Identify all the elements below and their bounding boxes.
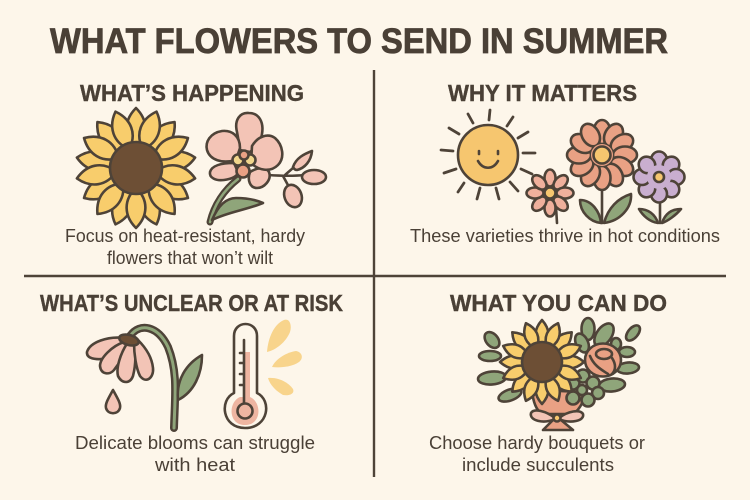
- sunflower: [500, 320, 584, 404]
- icon: orchid: [207, 113, 326, 222]
- succulent: [566, 370, 604, 406]
- icon: wilting flower: [87, 328, 202, 428]
- heading: what's happening: WHAT’S HAPPENING: [80, 80, 304, 106]
- icon: thermometer: [225, 324, 266, 428]
- panel: why it matters: [410, 80, 720, 246]
- body text: These varieties thrive in hot conditions: [410, 226, 720, 246]
- heading: what you can do: WHAT YOU CAN DO: [450, 290, 667, 316]
- body text: [75, 433, 315, 475]
- body text: [65, 226, 305, 268]
- heading: why it matters: WHY IT MATTERS: [448, 80, 637, 106]
- body text: Delicate blooms can struggle: [75, 433, 315, 453]
- body text: include succulents: [462, 455, 614, 475]
- heading: what's unclear or at risk: WHAT’S UNCLEAR OR AT RISK: [40, 290, 343, 316]
- panel: what's happening: [65, 80, 326, 268]
- panel: what you can do: [429, 290, 667, 475]
- bow: [531, 411, 583, 430]
- body text: Focus on heat-resistant, hardy: [65, 226, 305, 246]
- title: WHAT FLOWERS TO SEND IN SUMMER: [50, 22, 668, 61]
- icon: orange flower: [567, 120, 637, 223]
- icon: small pink flower: [526, 170, 574, 223]
- body text: Choose hardy bouquets or: [429, 433, 645, 453]
- icon: smiling sun: [441, 110, 535, 199]
- icon: heat marks: [267, 320, 302, 395]
- body text: with heat: [154, 455, 235, 475]
- panel: what's unclear or at risk: [40, 290, 343, 475]
- body text: [429, 433, 645, 475]
- rose: [585, 344, 621, 376]
- icon: purple flower: [634, 152, 684, 223]
- icon: bouquet: [477, 318, 643, 430]
- icon: sunflower: [75, 108, 197, 228]
- body text: flowers that won’t wilt: [107, 248, 273, 268]
